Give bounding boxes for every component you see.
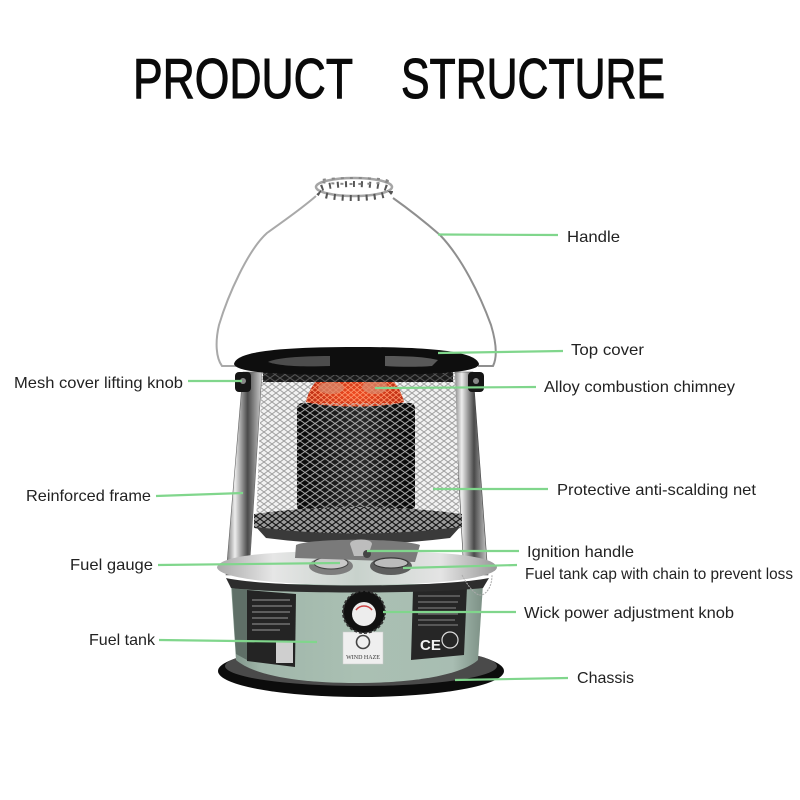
label: mesh cover lifting knob: Mesh cover lifting knob	[14, 375, 183, 392]
label: fuel gauge: Fuel gauge	[70, 557, 153, 574]
chassis	[218, 645, 504, 697]
label: fuel tank: Fuel tank	[89, 632, 156, 649]
title	[133, 47, 665, 111]
label: handle: Handle	[567, 229, 620, 246]
label: wick knob: Wick power adjustment knob	[524, 605, 734, 622]
label: protective net: Protective anti-scalding net	[557, 482, 757, 499]
handle	[217, 178, 496, 366]
left label plate	[232, 588, 296, 667]
wind haze logo	[343, 632, 383, 664]
title: PRODUCT	[133, 47, 353, 111]
label: alloy combustion chimney: Alloy combustion chimney	[544, 379, 735, 396]
top cover	[234, 347, 479, 375]
wind haze logo: WIND HAZE	[346, 655, 380, 661]
label: fuel tank cap: Fuel tank cap with chain to prevent loss	[525, 566, 793, 583]
label: reinforced frame: Reinforced frame	[26, 488, 151, 505]
reinforced frame posts	[226, 372, 488, 575]
fuel tank	[231, 584, 483, 683]
knobs	[235, 372, 484, 392]
right label plate	[411, 587, 467, 660]
leader lines	[156, 234, 568, 680]
silver plate	[217, 540, 497, 595]
right label plate: CE	[420, 637, 441, 654]
labels	[14, 229, 793, 687]
fuel tank cap	[370, 557, 492, 595]
fuel gauge	[309, 557, 353, 575]
wick power knob	[343, 591, 385, 633]
heater illustration	[217, 178, 504, 697]
label: top cover: Top cover	[571, 342, 645, 359]
protective net	[254, 365, 462, 534]
label: ignition handle: Ignition handle	[527, 544, 634, 561]
title: STRUCTURE	[401, 47, 665, 111]
label: chassis: Chassis	[577, 670, 634, 687]
ignition parts	[295, 540, 420, 562]
combustion chimney	[297, 365, 415, 511]
lower ring	[256, 527, 460, 544]
